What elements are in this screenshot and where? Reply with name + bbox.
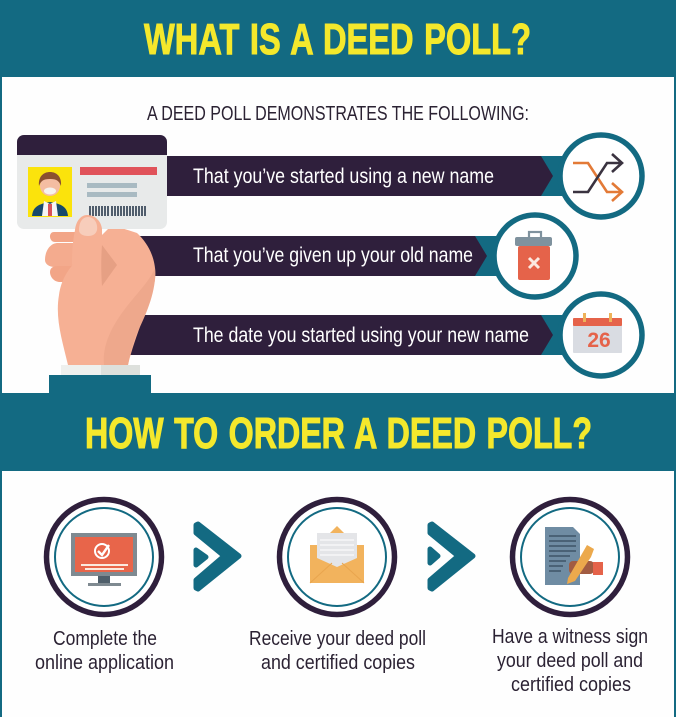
barcode [90, 206, 145, 216]
icon: envelope in circle [280, 500, 394, 614]
step 1 label: Complete the [53, 627, 157, 650]
bar 3 [130, 315, 562, 355]
arrow 2 [430, 524, 473, 589]
step 3 label: certified copies [511, 673, 631, 696]
icon: trash can in circle [494, 215, 576, 297]
bar 2 [130, 236, 500, 276]
icon: signing document in circle [512, 500, 628, 614]
icon: computer in circle [46, 500, 162, 614]
arrow 1 [196, 524, 239, 589]
grey lines [87, 183, 137, 188]
bar 2 text: That you’ve given up your old name [193, 244, 473, 267]
title: what is a deed poll: WHAT IS A DEED POLL? [144, 16, 531, 64]
bar 1 text: That you’ve started using a new name [193, 165, 494, 188]
step 2 label: Receive your deed poll [249, 627, 426, 650]
sleeve [49, 375, 151, 395]
step 2 label: and certified copies [261, 651, 415, 674]
step 3 label: Have a witness sign [492, 625, 648, 648]
step 3: witness sign [492, 500, 648, 696]
id card [17, 135, 167, 229]
bar 3 text: The date you started using your new name [193, 324, 529, 347]
red strip [80, 167, 157, 175]
step 1 label: online application [35, 651, 174, 674]
icon: calendar in circle [560, 294, 642, 376]
fingers [50, 232, 80, 242]
subtitle: A DEED POLL DEMONSTRATES THE FOLLOWING: [147, 102, 529, 125]
top banner [0, 0, 676, 77]
step 1: complete application [35, 500, 174, 674]
portrait [28, 167, 72, 217]
calendar date: 26 [587, 329, 611, 352]
thumb [72, 215, 103, 301]
step 2 label [249, 627, 426, 674]
icon: shuffle in circle [560, 135, 642, 217]
bar 1 [150, 156, 562, 196]
step 3 label: your deed poll and [497, 649, 643, 672]
hand [58, 225, 155, 365]
step 1 label [35, 627, 174, 674]
hand holding id card [17, 135, 167, 395]
second banner [0, 393, 676, 471]
step 3 label [492, 625, 648, 696]
step 2: receive deed poll [249, 500, 426, 674]
shirt cuff [61, 365, 140, 375]
